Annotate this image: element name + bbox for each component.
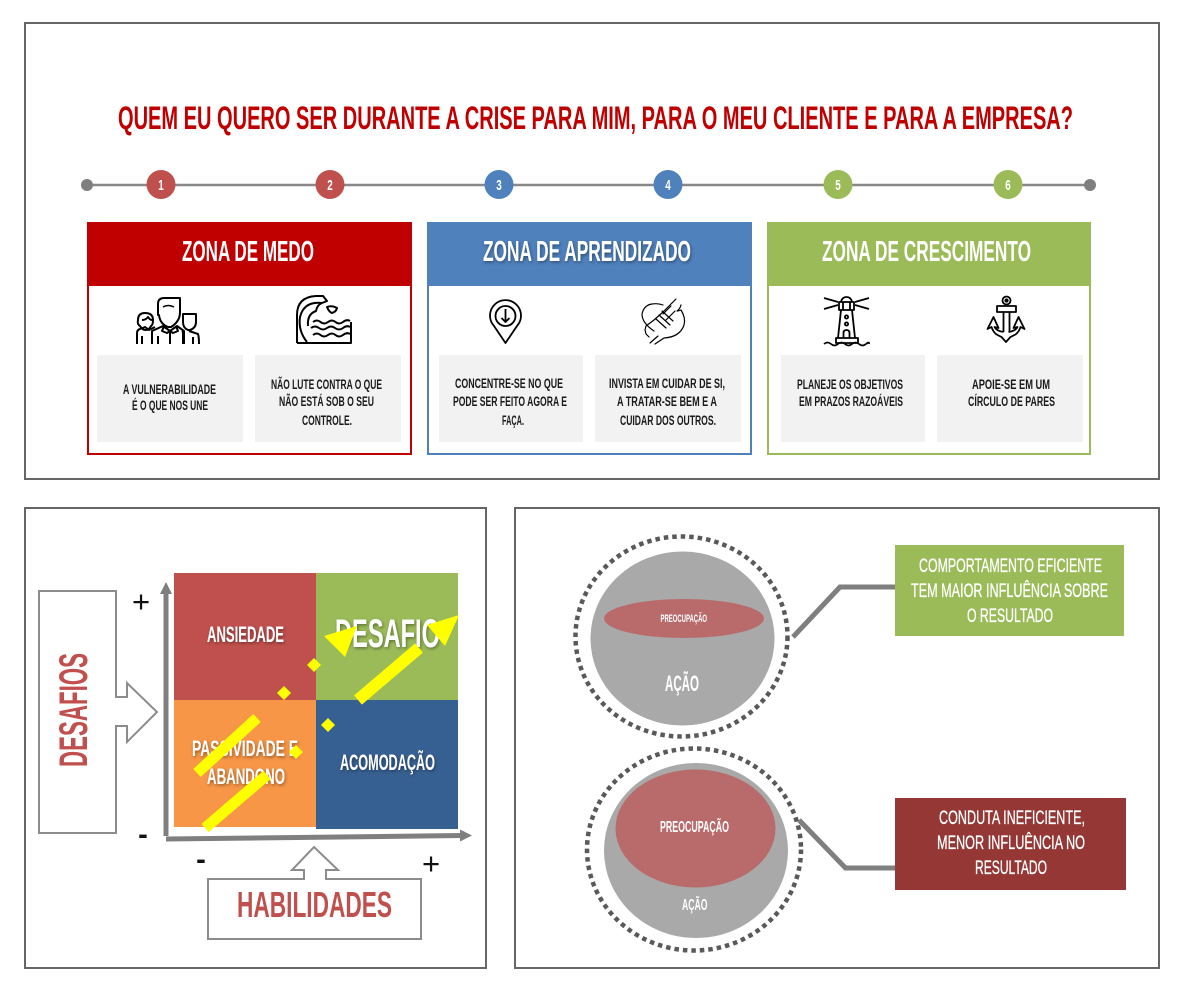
card: não lute [255,355,401,442]
card: invista: INVISTA EM CUIDAR DE SI, [609,376,725,391]
timeline with numbered steps: 5 [835,177,841,194]
quadrant: ansiedade [174,573,316,700]
card: a vulnerabilidade [97,355,243,442]
timeline with numbered steps: 2 [327,177,333,194]
quadrant: desafio [316,573,458,700]
quadrant: desafio: DESAFIO [335,612,440,656]
card: concentre-se: CONCENTRE-SE NO QUE [455,376,563,391]
card: concentre-se: FAÇA. [502,413,524,428]
callout: comportamento eficiente: O RESULTADO [967,606,1053,627]
callout: comportamento eficiente [895,545,1124,636]
panel: flow matrix [25,508,486,968]
heading: zona de aprendizado: ZONA DE APRENDIZADO [483,236,691,268]
panel: zona de medo [87,222,412,454]
card: não lute: NÃO ESTÁ SOB O SEU [279,394,374,409]
card: não lute: CONTROLE. [302,413,352,428]
quadrant: passividade e abandono [174,700,316,827]
timeline with numbered steps: 6 [1005,177,1011,194]
diagram: small worry, large action: PREOCUPAÇÃO [660,612,707,625]
panel: zona de crescimento [767,222,1091,454]
card: a vulnerabilidade: É O QUE NOS UNE [132,398,208,413]
icon: wave [297,296,351,343]
panel: zones of crisis response [25,23,1159,479]
card: planeje: PLANEJE OS OBJETIVOS [797,377,903,392]
card: invista [595,355,741,442]
arrow label: desafios [39,591,157,833]
callout: conduta ineficiente: MENOR INFLUÊNCIA NO [937,832,1085,854]
quadrant: ansiedade: ANSIEDADE [207,622,284,647]
icon: people [137,298,199,344]
card: planeje [781,355,925,442]
card: apoie-se [937,355,1083,442]
arrow label: habilidades: HABILIDADES [237,884,392,925]
icon: hands forming a heart [642,299,685,344]
quadrant: acomodação: ACOMODAÇÃO [340,750,435,775]
diagram: large worry, small action [587,748,801,950]
quadrant: passividade e abandono: PASSIVIDADE E [192,736,298,761]
quadrant: passividade e abandono: ABANDONO [207,764,285,789]
callout: conduta ineficiente: RESULTADO [975,858,1047,879]
yellow growth path markers [197,615,459,828]
timeline with numbered steps: 3 [496,177,502,194]
heading: zona de crescimento: ZONA DE CRESCIMENTO [822,236,1031,268]
card: invista: A TRATAR-SE BEM E A [617,394,717,409]
card: planeje: EM PRAZOS RAZOÁVEIS [799,394,903,409]
panel: worry versus action [515,508,1159,968]
timeline with numbered steps [81,170,1096,199]
card: invista: CUIDAR DOS OUTROS. [620,413,716,428]
timeline with numbered steps: 4 [665,177,671,194]
icon: lighthouse [824,297,869,346]
card: apoie-se: CÍRCULO DE PARES [968,394,1055,409]
heading: zona de medo: ZONA DE MEDO [182,236,314,268]
panel: zona de aprendizado [427,222,752,454]
quadrant: acomodação [316,700,458,829]
connector: green callout [793,587,895,637]
diagram: large worry, small action: PREOCUPAÇÃO [660,816,729,836]
diagram: small worry, large action: AÇÃO [665,671,699,696]
card: concentre-se [439,355,583,442]
callout: conduta ineficiente: CONDUTA INEFICIENTE, [939,808,1085,829]
chart axes: + [422,846,440,881]
arrow label: desafios: DESAFIOS [52,653,96,767]
connector: red callout [799,820,895,868]
card: concentre-se: PODE SER FEITO AGORA E [453,394,567,409]
chart axes: + [132,584,150,619]
callout: conduta ineficiente [895,798,1126,890]
timeline with numbered steps: 1 [158,177,164,194]
chart axes: - [196,844,206,876]
card: a vulnerabilidade: A VULNERABILIDADE [123,382,216,397]
arrow label: habilidades [208,847,421,939]
icon: anchor [988,296,1024,342]
diagram: small worry, large action [576,536,788,736]
card: apoie-se: APOIE-SE EM UM [972,377,1050,392]
chart axes [132,582,472,881]
icon: location pin [490,300,521,343]
chart axes: - [138,819,148,851]
card: não lute: NÃO LUTE CONTRA O QUE [271,377,382,392]
diagram: large worry, small action: AÇÃO [682,894,708,914]
